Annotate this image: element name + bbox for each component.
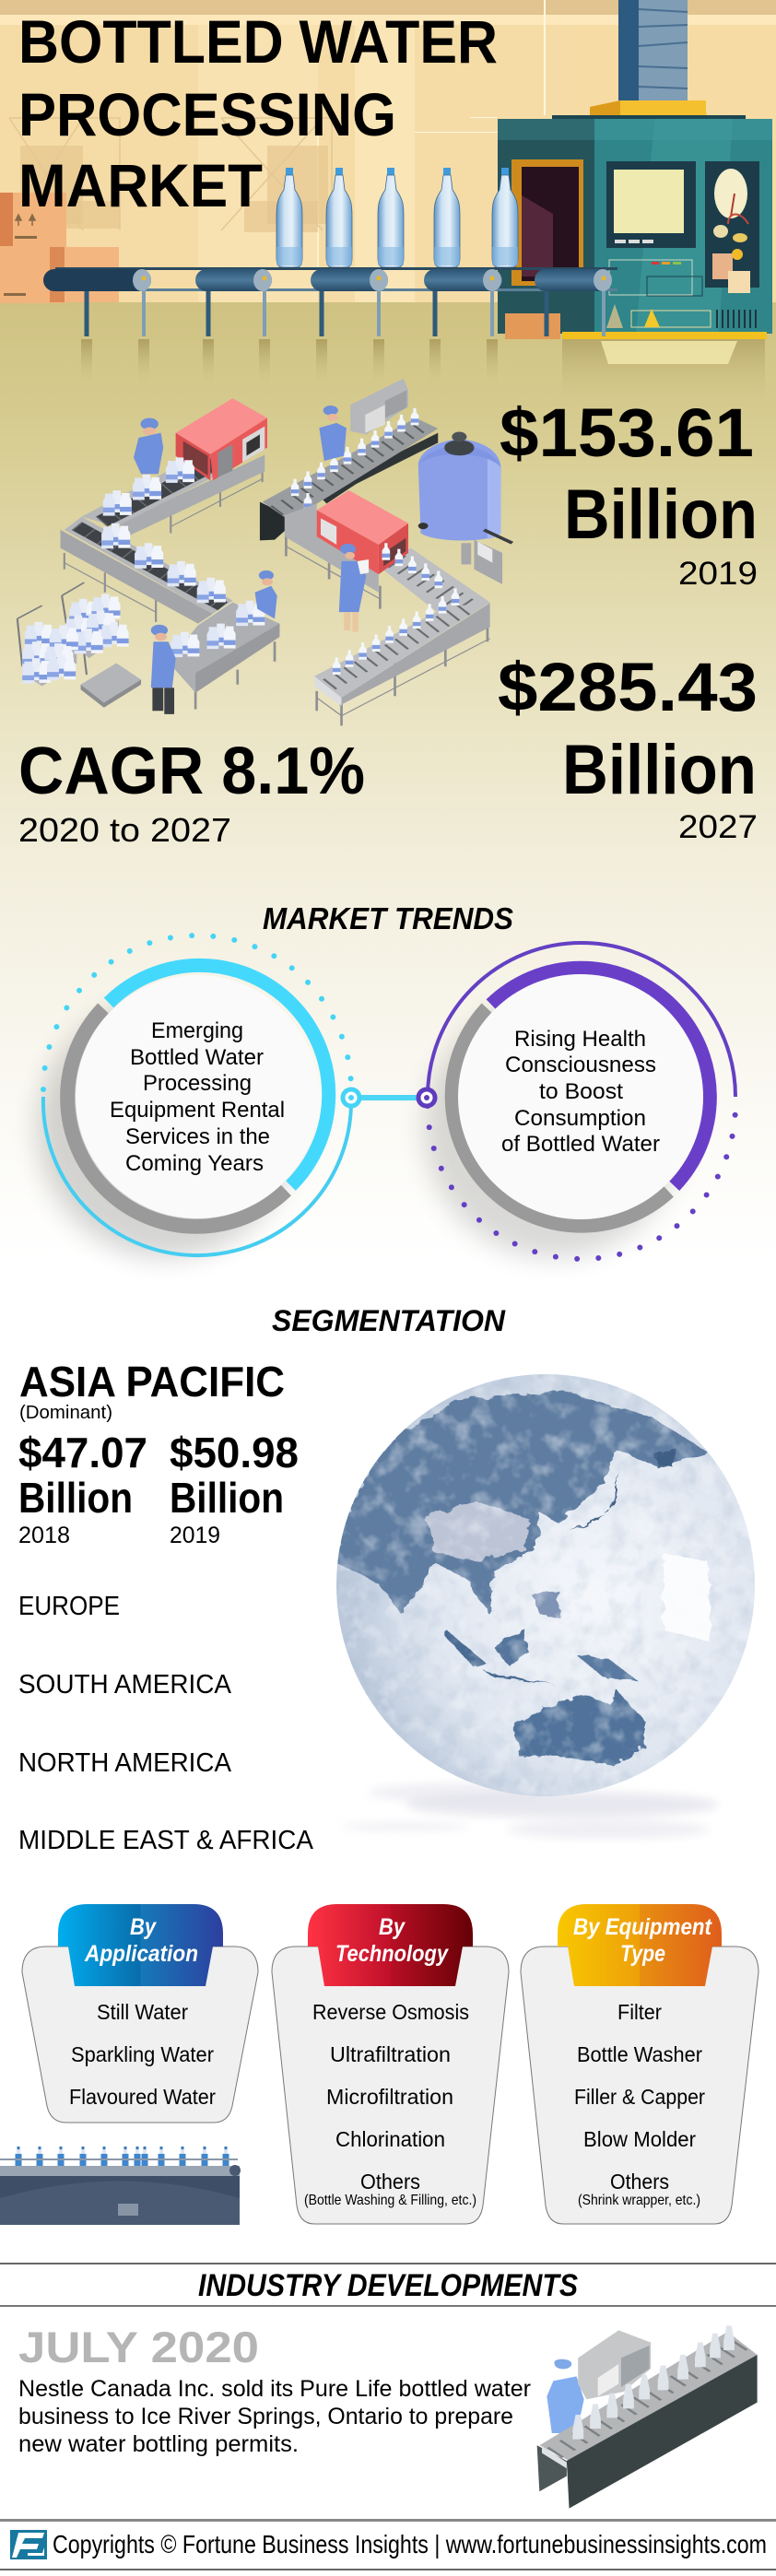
other regions list [18, 1592, 314, 1855]
text: Processing [143, 1071, 252, 1096]
dominant region: Asia Pacific: $50.98 [170, 1429, 299, 1476]
small conveyor machine illustration [0, 2147, 241, 2225]
panel: by equipment type: Filter [617, 2000, 662, 2024]
header factory scene [0, 0, 776, 406]
worker top [319, 406, 347, 461]
development description: new water bottling permits. [18, 2431, 299, 2457]
CAGR: CAGR 8.1% [18, 735, 365, 808]
other regions list: EUROPE [18, 1592, 120, 1621]
market size 2027: 2027 [678, 809, 758, 845]
other regions list: NORTH AMERICA [18, 1748, 232, 1778]
panel: by technology: Ultrafiltration [330, 2042, 451, 2066]
footer lines [0, 2519, 776, 2570]
other regions list: SOUTH AMERICA [18, 1670, 232, 1700]
tab: Type [620, 1941, 665, 1967]
panel: by technology: Others [360, 2170, 420, 2194]
tab [58, 1904, 223, 1986]
bottling machine [498, 100, 772, 339]
text [110, 1018, 285, 1176]
page background gradient [0, 302, 776, 1263]
heading: segmentation: SEGMENTATION [272, 1304, 506, 1337]
text: Emerging [151, 1018, 243, 1043]
dominant region: Asia Pacific: 2019 [170, 1523, 220, 1548]
isometric production line illustration [18, 379, 512, 725]
panel: by equipment type: Others [610, 2170, 669, 2194]
continents [336, 1392, 712, 1766]
dominant region: Asia Pacific [18, 1358, 299, 1548]
text: Consciousness [505, 1053, 656, 1077]
heading: industry developments: INDUSTRY DEVELOPMENTS [198, 2268, 578, 2303]
dominant region: Asia Pacific: Billion [170, 1474, 284, 1522]
panel: by equipment type: (Shrink wrapper, etc.) [578, 2193, 700, 2208]
divider lines for developments [0, 2263, 776, 2307]
market size 2019: $153.61 [500, 394, 754, 471]
bottles on lower conveyor [333, 543, 459, 675]
dominant region: Asia Pacific: (Dominant) [19, 1403, 112, 1423]
conveyor belt [43, 267, 617, 336]
development description [18, 2376, 531, 2457]
factory wall [0, 0, 776, 302]
panel: by technology: (Bottle Washing & Filling, etc.) [304, 2193, 476, 2208]
date: July 2020: JULY 2020 [18, 2323, 259, 2371]
panel: by equipment type: Blow Molder [583, 2127, 696, 2151]
control unit top [350, 379, 408, 434]
title: PROCESSING [18, 80, 396, 148]
machine door [511, 159, 583, 286]
panel: by application: Flavoured Water [69, 2085, 216, 2109]
market size 2019: Billion [564, 476, 758, 554]
other regions list: MIDDLE EAST & AFRICA [18, 1826, 314, 1855]
trend circle: health consciousness [424, 943, 735, 1259]
title: BOTTLED WATER [18, 7, 498, 76]
lower right conveyor [285, 503, 490, 725]
market size 2027 [498, 649, 758, 845]
text: Coming Years [125, 1151, 264, 1176]
logo [10, 2530, 47, 2559]
panel: by technology: Chlorination [335, 2127, 445, 2151]
panel: by technology: Reverse Osmosis [312, 2000, 469, 2024]
panel: by equipment type: Bottle Washer [577, 2042, 702, 2066]
tab: Application [84, 1941, 198, 1967]
text: Services in the [125, 1124, 270, 1149]
control panel by tank [474, 530, 512, 584]
title [18, 7, 498, 219]
text: Consumption [514, 1106, 646, 1131]
panel: by application [22, 1904, 258, 2123]
left conveyor [61, 451, 265, 624]
blue tank [418, 432, 500, 564]
text [501, 1027, 660, 1157]
development description: Nestle Canada Inc. sold its Pure Life bottled water [18, 2376, 531, 2402]
text: Rising Health [514, 1027, 646, 1052]
dominant region: Asia Pacific: $47.07 [18, 1429, 147, 1476]
trend circle: equipment rental [37, 935, 351, 1258]
panel: by equipment type: Filler & Capper [574, 2085, 705, 2109]
CAGR [18, 735, 365, 849]
panel: by equipment type [521, 1904, 758, 2224]
text: Bottled Water [130, 1045, 264, 1070]
water puddle [341, 1783, 719, 1839]
right dark conveyor [260, 418, 438, 540]
development description: business to Ice River Springs, Ontario to prepare [18, 2404, 513, 2429]
text: Equipment Rental [110, 1098, 285, 1123]
title: MARKET [18, 151, 263, 219]
panel: by application: Still Water [97, 2000, 188, 2024]
panel: by application: Sparkling Water [71, 2042, 214, 2066]
water bottles on belt [276, 168, 518, 267]
dominant region: Asia Pacific: Billion [18, 1474, 133, 1522]
dominant region: Asia Pacific: 2018 [18, 1523, 70, 1548]
globe of water [336, 1373, 757, 1839]
bottles on dark conveyor [291, 408, 418, 511]
carts of bottles [18, 582, 141, 708]
packing table [170, 602, 279, 709]
tab: By [130, 1914, 157, 1940]
market size 2027: Billion [562, 731, 757, 809]
red machine upper [176, 398, 267, 480]
floor shadows under conveyor legs [81, 339, 765, 406]
machine screen [606, 161, 696, 248]
tab: By [379, 1914, 406, 1940]
dominant region: Asia Pacific: ASIA PACIFIC [19, 1358, 285, 1406]
stacked cardboard boxes [0, 193, 119, 303]
tab: By Equipment [573, 1914, 712, 1940]
conveyor worker illustration [537, 2325, 758, 2509]
tab [558, 1904, 722, 1986]
column pipe [618, 0, 688, 100]
heading: market trends: MARKET TRENDS [263, 901, 513, 935]
connector between trends [343, 1089, 435, 1106]
bottle clusters on left line [101, 457, 265, 657]
market size 2019 [500, 394, 758, 592]
tab [308, 1904, 473, 1986]
text: of Bottled Water [501, 1132, 660, 1157]
workers left [134, 418, 277, 714]
gauge panel [705, 161, 759, 293]
CAGR: 2020 to 2027 [18, 811, 231, 849]
text: to Boost [539, 1079, 623, 1104]
panel: by technology: Microfiltration [326, 2085, 453, 2109]
panel: by technology [272, 1904, 509, 2224]
market size 2027: $285.43 [498, 649, 758, 725]
worker with clipboard [339, 544, 369, 632]
red machine lower [317, 490, 408, 574]
market size 2019: 2019 [678, 556, 758, 592]
tab: Technology [335, 1941, 449, 1967]
